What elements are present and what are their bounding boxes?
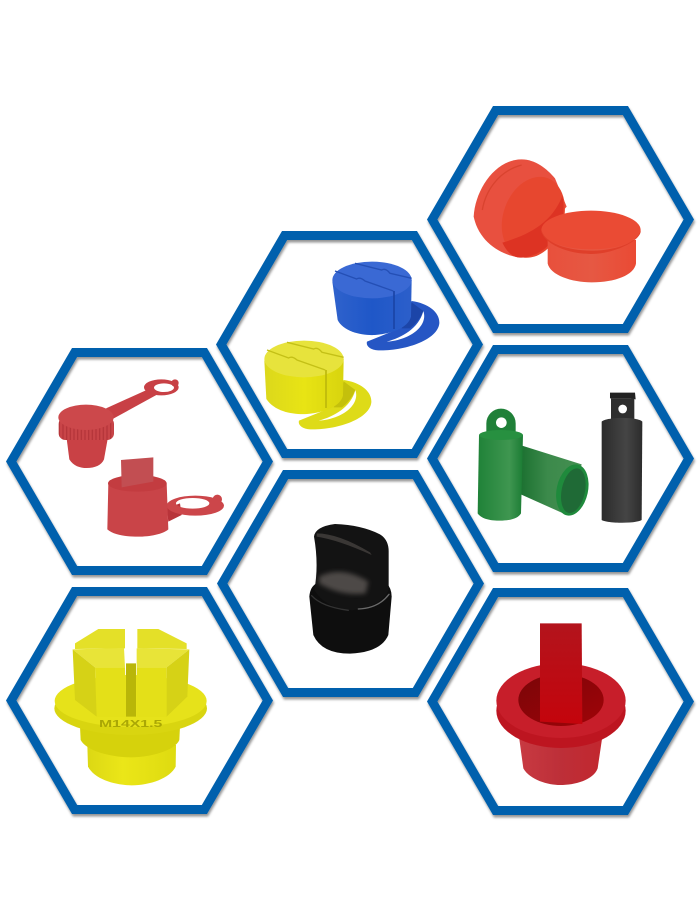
product: red plug with ring [107,457,224,537]
hexagon frame [432,350,689,568]
product: green upright sleeve [478,409,523,521]
product: black sleeve [602,393,642,523]
product: red plug with pull tab [496,623,626,785]
embossed size marking: M14X1.5 [99,719,163,730]
hexagon frame [221,236,478,454]
product: yellow plug [54,629,207,785]
hexagon frame [11,352,268,570]
product: black knob [309,524,392,654]
panel: red tethered caps [11,352,268,570]
product: two red caps [474,159,641,282]
hexagon frame [432,110,689,328]
panel: green and black sleeves [432,350,689,568]
hexagon frame [11,592,268,810]
panel: yellow slotted plug [11,592,268,810]
panel: black knob cap [222,474,479,692]
panel: blue and yellow split caps [221,236,478,454]
product: green tilted sleeve [520,445,593,519]
hexagon frame [432,592,689,810]
product: yellow split cap [264,341,371,429]
product: red cap with strap [58,379,179,468]
product: blue split cap [332,262,439,350]
hexagon frame [222,474,479,692]
panel: red pull-tab plug [432,592,689,810]
panel: red round caps [432,110,689,328]
